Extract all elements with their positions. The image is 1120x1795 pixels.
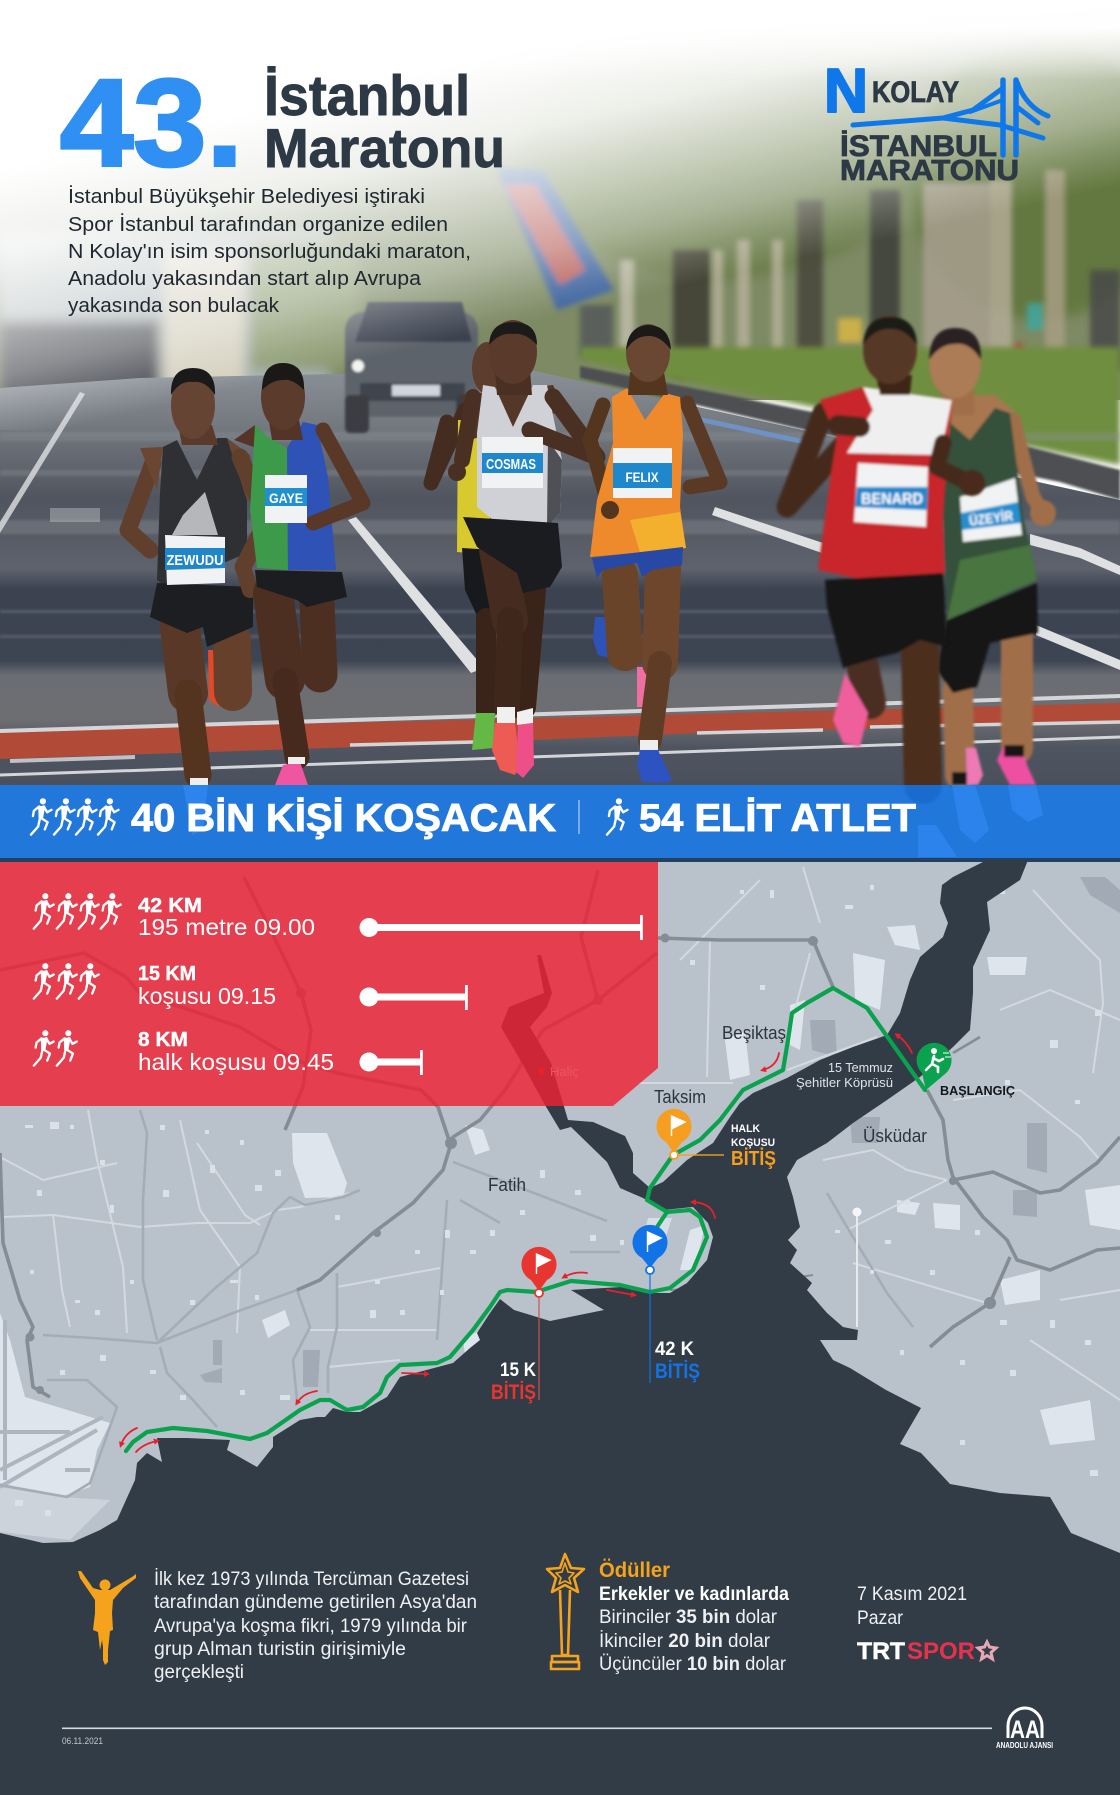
row: 8 KM — [34, 1029, 423, 1075]
pin: 42K finish — [633, 1225, 700, 1383]
title words: Maratonu — [264, 117, 505, 179]
white fade over photo top — [0, 0, 1120, 430]
headline: 40 thousand runners: 40 BİN KİŞİ KOŞACAK — [131, 797, 556, 840]
pin: start — [917, 1043, 1016, 1098]
grass verge — [580, 347, 1120, 465]
interchanges — [26, 934, 996, 1394]
label: 15K finish — [491, 1360, 536, 1404]
runner: hidden runner in yellow — [431, 342, 502, 750]
bib name: FELIX — [626, 469, 659, 485]
label: public run finish: KOŞUSU — [731, 1137, 775, 1149]
date stamp: 06.11.2021 — [62, 1736, 103, 1746]
icon: runners — [34, 963, 99, 999]
row: 42 KM — [34, 893, 643, 940]
icon: trophy — [547, 1554, 584, 1669]
prizes text: Erkekler ve kadınlarda — [599, 1584, 789, 1605]
bib name: GAYE — [269, 490, 303, 506]
title number: 43. — [60, 54, 243, 192]
place labels: Fatih — [488, 1175, 526, 1195]
light urban blocks — [0, 925, 1120, 1497]
label: Haliç: Haliç — [550, 1064, 579, 1079]
history text: İlk kez 1973 yılında Tercüman Gazetesi — [154, 1569, 469, 1590]
marker: white pole on Asian side — [852, 1208, 862, 1327]
label: public run finish: BİTİŞ — [731, 1147, 776, 1170]
runner: Gaye — [234, 363, 363, 785]
prizes text: Üçüncüler 10 bin dolar — [599, 1654, 787, 1675]
logo: TRT Spor — [857, 1638, 996, 1665]
photo: runners on the road — [0, 0, 1120, 785]
intro text: İstanbul Büyükşehir Belediyesi iştiraki — [68, 185, 425, 208]
headline: elite athletes: 54 ELİT ATLET — [639, 797, 916, 840]
runner: Benard — [787, 316, 985, 785]
row: 8 KM: halk koşusu 09.45 — [138, 1049, 334, 1075]
label: public run finish: HALK — [731, 1123, 760, 1135]
pin: 15K finish — [491, 1247, 556, 1404]
bib name: COSMAS — [486, 456, 536, 473]
lower dark background — [0, 1540, 1120, 1795]
green marathon route — [126, 988, 925, 1451]
logo: N Kolay İstanbul Maratonu: KOLAY — [872, 76, 959, 109]
road markings — [0, 392, 1120, 673]
row: 42 KM: 42 KM — [138, 895, 202, 917]
logo: TRT Spor: TRT — [857, 1638, 905, 1665]
history text: tarafından gündeme getirilen Asya'dan — [154, 1592, 477, 1613]
title words — [264, 64, 505, 179]
logo bridge — [853, 80, 1048, 155]
main highways — [0, 870, 1120, 1397]
logo: TRT Spor: SPOR — [907, 1638, 975, 1665]
prizes text: Ödüller — [599, 1559, 670, 1582]
intro text: yakasında son bulacak — [68, 295, 280, 317]
bar — [360, 915, 643, 940]
bar — [360, 985, 468, 1010]
minor streets — [0, 867, 1120, 1400]
label: public run finish — [731, 1123, 776, 1170]
intro text: Anadolu yakasından start alıp Avrupa — [68, 268, 422, 290]
photo background trees — [0, 0, 1120, 420]
history text: gerçekleşti — [154, 1662, 244, 1683]
icon: runners — [34, 1030, 77, 1066]
date text: Pazar — [857, 1608, 904, 1629]
row: 15 KM — [34, 963, 468, 1010]
distance rows — [34, 893, 643, 1075]
map of route — [0, 860, 1120, 1600]
row: 42 KM: 195 metre 09.00 — [138, 914, 315, 940]
date text — [857, 1584, 967, 1629]
label: 42K finish: 42 K — [655, 1339, 694, 1360]
place labels: Üsküdar — [863, 1126, 927, 1146]
logo: N Kolay İstanbul Maratonu — [824, 57, 1048, 187]
runways — [0, 1320, 103, 1487]
banner — [496, 167, 614, 310]
runner: Üzeyir — [929, 328, 1056, 785]
icon: four runners — [31, 798, 118, 835]
lane lines on finish area — [0, 696, 1120, 775]
road shadows — [0, 432, 1120, 638]
runner: Zewudu — [128, 368, 267, 785]
bib name: BENARD — [861, 491, 923, 508]
place labels: Taksim — [654, 1087, 706, 1107]
date text: 7 Kasım 2021 — [857, 1584, 967, 1605]
road surface — [0, 370, 1120, 785]
logo: Anadolu Ajansi — [996, 1708, 1053, 1750]
label: start: BAŞLANGIÇ — [940, 1083, 1016, 1098]
label: 42K finish: BİTİŞ — [655, 1360, 700, 1383]
label: Haliç — [538, 1064, 579, 1079]
prizes text: İkinciler 20 bin dolar — [599, 1631, 771, 1652]
pin: public run finish — [656, 1109, 776, 1170]
intro text: N Kolay'ın isim sponsorluğundaki maraton, — [68, 241, 471, 263]
row: 15 KM: 15 KM — [138, 963, 196, 985]
intro text: Spor İstanbul tarafından organize edilen — [68, 213, 448, 236]
place labels: Beşiktaş — [722, 1023, 786, 1043]
label: 42K finish — [655, 1339, 700, 1383]
row: 8 KM: 8 KM — [138, 1029, 188, 1051]
prizes text: Birinciler 35 bin dolar — [599, 1607, 778, 1628]
place labels: 15 Temmuz — [828, 1060, 893, 1075]
feet seen through band — [183, 785, 1043, 857]
bib name: ÜZEYİR — [968, 507, 1014, 529]
medium roads — [0, 1110, 913, 1497]
history text: Avrupa'ya koşma fikri, 1979 yılında bir — [154, 1616, 468, 1637]
small light buildings — [15, 885, 1101, 1516]
direction arrows — [121, 1035, 912, 1452]
place labels: Şehitler Köprüsü — [796, 1075, 893, 1090]
icon: single runner — [607, 798, 627, 835]
prizes text — [599, 1559, 789, 1675]
label: 15K finish: BİTİŞ — [491, 1381, 536, 1404]
map land base — [0, 862, 1120, 1562]
row: 15 KM: koşusu 09.15 — [138, 983, 276, 1009]
bib name: ZEWUDU — [166, 552, 224, 569]
red running strip — [0, 703, 1120, 759]
blue headline band — [0, 785, 1120, 858]
history text: grup Alman turistin girişimiyle — [154, 1639, 406, 1660]
logo: N Kolay İstanbul Maratonu: İSTANBUL — [840, 130, 997, 163]
label: 15K finish: 15 K — [500, 1360, 536, 1381]
sea and straits — [0, 860, 1120, 1600]
logo N: N — [824, 57, 868, 126]
title words: İstanbul — [264, 64, 470, 128]
car — [345, 302, 478, 433]
logo: Anadolu Ajansi: AA — [1010, 1716, 1040, 1744]
bar — [360, 1050, 423, 1075]
place labels — [488, 1023, 927, 1195]
curb — [580, 366, 1120, 500]
logo: N Kolay İstanbul Maratonu: MARATONU — [840, 155, 1019, 187]
parks — [200, 877, 1120, 1387]
runner: Cosmas — [448, 320, 597, 778]
intro text — [68, 185, 471, 317]
icon: runners — [34, 893, 121, 929]
history text — [154, 1569, 477, 1683]
logo: Anadolu Ajansi: ANADOLU AJANSI — [996, 1741, 1053, 1750]
icon: orange runner arms raised — [78, 1571, 136, 1665]
red distance panel background — [0, 862, 658, 1106]
runner: Felix — [590, 324, 720, 783]
